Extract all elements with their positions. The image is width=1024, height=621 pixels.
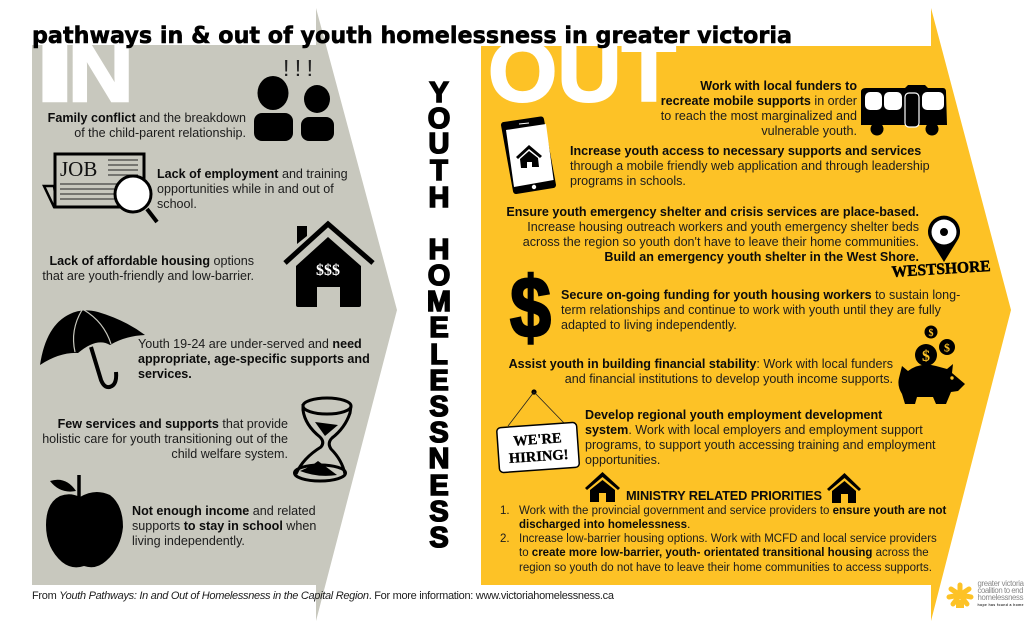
text: regional employment: system. Work with local employers and employment support [585, 423, 923, 437]
text: financial stability [509, 357, 893, 386]
icon: we're hiring sign: HIRING! [508, 447, 569, 467]
text: increase youth access: programs in schools. [570, 174, 686, 188]
text: secure funding: Secure on-going funding for youth housing workers to sustain long- [561, 288, 960, 302]
text: few services: child welfare system. [171, 447, 288, 461]
text: lack of affordable housing: Lack of affordable housing options [49, 254, 254, 268]
icon: hourglass [294, 398, 351, 481]
text: few services: Few services and supports that provide [58, 417, 288, 431]
text: secure funding [561, 288, 960, 332]
logo: coalition: greater victoria [978, 579, 1024, 588]
list: ministry priorities: discharged into homelessness. [519, 519, 690, 531]
vertical heading: youth homelessness: N [429, 443, 449, 475]
icon: job newspaper [44, 154, 157, 222]
icon: piggy bank with coins: $ [922, 348, 930, 365]
vertical heading: youth homelessness: H [429, 182, 449, 214]
heading: IN [35, 25, 134, 119]
vertical heading: youth homelessness [427, 77, 451, 554]
text: work with local funders [661, 79, 857, 138]
text: secure funding: adapted to living independently. [561, 318, 737, 332]
icon: house with dollars: $$$ [316, 262, 340, 279]
text: financial stability: and financial institutions to develop youth income supports. [565, 372, 893, 386]
icon: piggy bank with coins: $ [928, 328, 934, 339]
text: work with local funders: Work with local funders to [700, 79, 857, 93]
vertical heading: youth homelessness: Y [429, 77, 449, 109]
vertical heading: youth homelessness: H [429, 234, 449, 266]
logo: coalition: hope has found a home [978, 603, 1024, 607]
logo: coalition: homelessness [978, 593, 1024, 602]
text: regional employment: programs, to support youth accessing training and employment [585, 438, 936, 452]
panel: in [32, 8, 397, 621]
text: not enough income: supports to stay in school when [132, 519, 316, 533]
icon: piggy bank with coins: $ [944, 340, 950, 354]
text: lack of employment: school. [157, 197, 197, 211]
text: few services: holistic care for youth transitioning out of the [42, 432, 288, 446]
heading: ministry related priorities: MINISTRY RELATED PRIORITIES [626, 488, 822, 503]
text: not enough income [132, 504, 316, 548]
vertical heading: youth homelessness: S [429, 522, 449, 554]
heading: IN: N [68, 25, 134, 119]
text: youth 19-24: services. [138, 367, 192, 381]
vertical heading: youth homelessness: S [429, 496, 449, 528]
text: youth 19-24: Youth 19-24 are under-served and need [138, 337, 362, 351]
icon: house left [585, 472, 620, 502]
text: work with local funders: recreate mobile supports in order [661, 94, 857, 108]
list: ministry priorities: region so youth do not have to leave their home communities to access supports. [519, 562, 932, 574]
icon: house with dollars [285, 224, 373, 307]
vertical heading: youth homelessness: E [429, 312, 449, 344]
vertical heading: youth homelessness: S [429, 417, 449, 449]
footer: source: From Youth Pathways: In and Out of Homelessness in the Capital Region. For more information: www.victoriahomelessness.ca [32, 590, 615, 602]
text: increase youth access [570, 144, 930, 188]
icon: we're hiring sign [497, 389, 580, 473]
logo: coalition: coalition to end [978, 586, 1024, 595]
icon: location pin [928, 216, 960, 262]
vertical heading: youth homelessness: U [429, 128, 449, 160]
list: ministry priorities: 1. [500, 505, 510, 517]
text: regional employment: opportunities. [585, 453, 660, 467]
text: not enough income: Not enough income and related [132, 504, 316, 518]
logo: coalition [949, 579, 1024, 608]
text: lack of affordable housing: that are youth-friendly and low-barrier. [42, 269, 254, 283]
text: place-based shelter: Build an emergency youth shelter in the West Shore. [604, 250, 919, 264]
icon: apple [46, 475, 123, 567]
text: youth 19-24 [138, 337, 370, 381]
text: regional employment: Develop regional youth employment development [585, 408, 883, 422]
vertical heading: youth homelessness: M [427, 286, 451, 318]
text: youth 19-24: appropriate, age-specific supports and [138, 352, 370, 366]
text: increase youth access: through a mobile friendly web application and through leadership [570, 159, 930, 173]
list: ministry priorities: Work with the provincial government and service providers to ensure youth are not [519, 505, 947, 517]
icon: job newspaper: JOB [60, 157, 97, 181]
icon: family conflict [254, 55, 334, 141]
label: westshore: WESTSHORE [891, 258, 991, 281]
text: work with local funders: to reach the most marginalized and [661, 109, 857, 123]
text: place-based shelter [506, 205, 919, 264]
list: ministry priorities: 2. [500, 533, 510, 545]
list: ministry priorities [500, 505, 947, 574]
text: increase youth access: Increase youth access to necessary supports and services [570, 144, 921, 158]
icon: phone with house [504, 120, 554, 191]
text: family conflict: of the child-parent relationship. [74, 126, 246, 140]
icon: we're hiring sign: WE'RE [513, 430, 562, 450]
text: lack of employment: opportunities while in and out of [157, 182, 334, 196]
vertical heading: youth homelessness: T [430, 155, 448, 187]
text: place-based shelter: Ensure youth emergency shelter and crisis services are place-based. [506, 205, 919, 219]
text: work with local funders: vulnerable youth. [761, 124, 857, 138]
list: ministry priorities: Increase low-barrier housing options. Work with MCFD and local service providers [519, 533, 937, 545]
heading: IN: I [35, 25, 75, 119]
text: secure funding: term relationships and continue to work with youth until they are fully [561, 303, 942, 317]
icon: bus [861, 85, 947, 136]
text: few services [42, 417, 288, 461]
icon: family conflict: !!! [283, 55, 313, 81]
text: place-based shelter: Increase housing outreach workers and youth emergency shelter beds [527, 220, 919, 234]
text: not enough income: living independently. [132, 534, 245, 548]
text: family conflict [48, 111, 246, 140]
vertical heading: youth homelessness: O [428, 260, 450, 292]
text: regional employment [585, 408, 936, 467]
vertical heading: youth homelessness: S [429, 391, 449, 423]
vertical heading: youth homelessness: L [430, 339, 448, 371]
vertical heading: youth homelessness: E [429, 365, 449, 397]
vertical heading: youth homelessness: E [429, 470, 449, 502]
text: lack of employment: Lack of employment and training [157, 167, 348, 181]
text: lack of employment [157, 167, 348, 211]
list: ministry priorities: to create more low-barrier, youth- orientated transitional housing across the [519, 547, 929, 559]
title: pathways in & out of youth homelessness in greater victoria [32, 21, 792, 49]
icon: house right [827, 473, 861, 503]
text: family conflict: Family conflict and the breakdown [48, 111, 246, 125]
text: place-based shelter: across the region so youth don't have to leave their home communities. [523, 235, 919, 249]
icon: umbrella [40, 310, 145, 387]
vertical heading: youth homelessness: O [428, 103, 450, 135]
icon: piggy bank with coins [898, 326, 965, 404]
heading: OUT: OUT [488, 24, 676, 120]
text: financial stability: Assist youth in building financial stability: Work with local funders [509, 357, 893, 371]
icon: dollar sign: $ [510, 260, 551, 356]
text: lack of affordable housing [42, 254, 254, 283]
